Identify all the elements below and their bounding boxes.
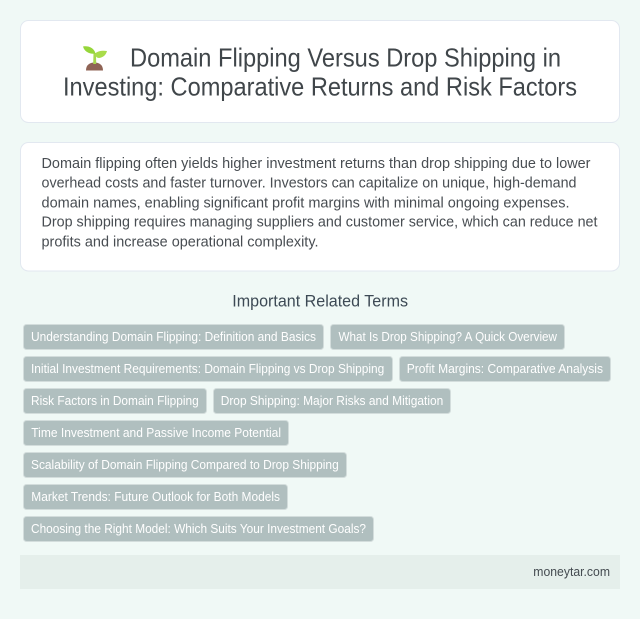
chip: time investment: [24, 420, 288, 446]
panel: title card: [20, 20, 620, 122]
chip: time investment: Time Investment and Passive Income Potential: [31, 425, 281, 440]
chip: scalability: Scalability of Domain Flipping Compared to Drop Shipping: [31, 457, 339, 472]
footer bar: moneytar.com: [533, 564, 610, 579]
icon: seedling: [83, 46, 107, 70]
panel: summary paragraph: profits and increase operational complexity.: [42, 234, 318, 251]
chip: choosing the right model: Choosing the Right Model: Which Suits Your Investment Goals?: [31, 521, 366, 536]
chip: initial investment requirements: [24, 356, 392, 382]
panel: summary paragraph: [20, 142, 620, 271]
panel: summary paragraph: Drop shipping requires managing suppliers and customer service, which can reduce net: [42, 214, 598, 231]
panel: summary paragraph: Domain flipping often yields higher investment returns than drop shipping due to lower: [42, 155, 590, 172]
chip: market trends: [24, 484, 288, 510]
chip: what is drop shipping: What Is Drop Shipping? A Quick Overview: [338, 329, 558, 344]
panel: related term chips: [24, 324, 610, 542]
title: Investing: Comparative Returns and Risk Factors: [63, 72, 577, 102]
chip: what is drop shipping: [330, 324, 564, 350]
chip: risk factors: [24, 388, 206, 414]
chip: choosing the right model: [24, 516, 374, 542]
chip: drop shipping risks: [214, 388, 450, 414]
heading: important related terms: Important Related Terms: [232, 292, 408, 310]
chip: profit margins: Profit Margins: Comparative Analysis: [407, 361, 603, 376]
footer bar: [20, 555, 620, 589]
panel: summary paragraph: domain names, enabling significant profit margins with minimal ongoing expenses.: [42, 195, 570, 212]
chip: understanding domain flipping: Understanding Domain Flipping: Definition and Basics: [31, 329, 316, 344]
title: [63, 42, 577, 102]
chip: understanding domain flipping: [24, 324, 324, 350]
chip: initial investment requirements: Initial Investment Requirements: Domain Flipping vs Drop Shipping: [31, 361, 384, 376]
chip: market trends: Market Trends: Future Outlook for Both Models: [31, 489, 280, 504]
chip: scalability: [24, 452, 346, 478]
panel: summary paragraph: overhead costs and faster turnover. Investors can capitalize on unique, high-demand: [42, 175, 576, 192]
title: Domain Flipping Versus Drop Shipping in: [130, 42, 561, 72]
chip: profit margins: [400, 356, 610, 382]
chip: risk factors: Risk Factors in Domain Flipping: [31, 393, 199, 408]
chip: drop shipping risks: Drop Shipping: Major Risks and Mitigation: [221, 393, 443, 408]
